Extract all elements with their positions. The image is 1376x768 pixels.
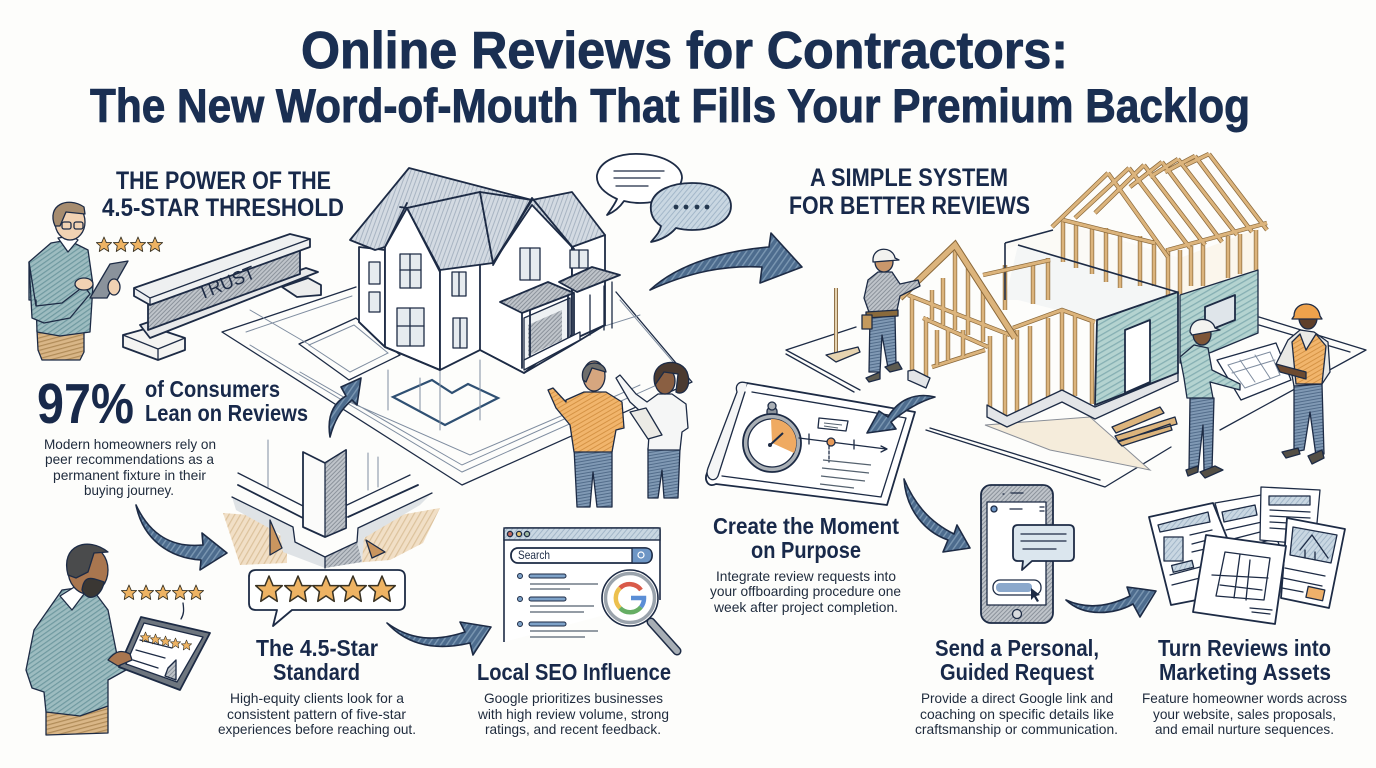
illustration: concrete foundation — [223, 440, 440, 568]
label: trust: TRUST — [195, 263, 259, 305]
text: modern homeowners: peer recommendations as a — [45, 451, 214, 467]
text: create the moment: Create the Moment — [713, 513, 899, 539]
illustration: workers reviewing plans — [1180, 304, 1330, 478]
title — [90, 22, 1250, 132]
illustration: 97 percent heading — [37, 372, 308, 436]
green wall with door — [1095, 292, 1178, 405]
illustration: timber house frame — [900, 154, 1267, 427]
icon: browser search window — [504, 528, 677, 651]
text: modern homeowners: buying journey. — [84, 482, 174, 498]
arrow: up to house — [329, 378, 361, 437]
callout: star rating speech bubble — [249, 570, 405, 626]
text: local seo influence: ratings, and recent feedback. — [485, 721, 661, 737]
text: modern homeowners: permanent fixture in their — [53, 467, 206, 483]
illustration: 97 percent heading: 97% — [37, 372, 134, 436]
heading: the power of the 4.5-star threshold: THE POWER OF THE — [116, 167, 331, 195]
text: the 4.5-star standard: The 4.5-Star — [256, 635, 378, 661]
illustration: stopwatch on blueprint scroll — [706, 382, 915, 505]
arrow: reviews to foundation — [136, 505, 227, 570]
stopwatch — [743, 402, 801, 472]
text: send a personal guided request — [915, 635, 1118, 737]
front wood studs — [908, 248, 1095, 420]
illustration: blueprint ground plan — [222, 287, 692, 485]
icon: phone with message — [981, 485, 1074, 623]
title: The New Word-of-Mouth That Fills Your Premium Backlog — [90, 79, 1250, 132]
text: turn reviews into marketing assets: your website, sales proposals, — [1153, 706, 1336, 722]
illustration: house — [350, 168, 620, 373]
text: local seo influence — [477, 659, 671, 737]
illustration: 97 percent heading: of Consumers — [145, 376, 280, 402]
arrow: house to system — [650, 233, 802, 290]
text: create the moment: your offboarding procedure one — [710, 583, 901, 599]
text: the 4.5-star standard: Standard — [273, 659, 360, 685]
illustration: 97 percent heading: Lean on Reviews — [145, 400, 308, 426]
icon: magnifier with google g — [602, 570, 677, 651]
text: the 4.5-star standard — [218, 635, 416, 737]
heading: the power of the 4.5-star threshold: 4.5-STAR THRESHOLD — [102, 194, 344, 222]
text: send a personal guided request: craftsmanship or communication. — [915, 721, 1118, 737]
text: local seo influence: Google prioritizes businesses — [484, 690, 663, 706]
illustration: trust beam — [123, 234, 321, 360]
text: create the moment: Integrate review requests into — [716, 568, 896, 584]
text: create the moment: on Purpose — [751, 537, 861, 563]
illustration: building frame plan on ground — [786, 317, 1366, 487]
heading: a simple system for better reviews — [789, 164, 1030, 220]
text: turn reviews into marketing assets — [1142, 635, 1347, 737]
arrow: standard to seo — [387, 622, 491, 655]
illustration: bearded man with tablet — [26, 544, 210, 735]
icon: speech bubbles — [597, 154, 731, 242]
text: send a personal guided request: Guided Request — [940, 659, 1094, 685]
text: turn reviews into marketing assets: Turn Reviews into — [1158, 635, 1331, 661]
arrow: stopwatch to phone — [904, 479, 970, 552]
text: create the moment: week after project completion. — [713, 599, 898, 615]
arrow: frame to stopwatch — [867, 396, 935, 433]
text: the 4.5-star standard: experiences before reaching out. — [218, 721, 416, 737]
heading: a simple system for better reviews: A SIMPLE SYSTEM — [810, 164, 1008, 192]
text: modern homeowners — [44, 436, 216, 498]
text: create the moment — [710, 513, 901, 615]
text: turn reviews into marketing assets: Feature homeowner words across — [1142, 690, 1347, 706]
illustration: man with tablet and four stars — [29, 202, 163, 360]
text: send a personal guided request: Provide a direct Google link and — [921, 690, 1113, 706]
illustration: stacked lumber — [1112, 407, 1177, 446]
arrow: phone to documents — [1066, 587, 1156, 617]
icon: marketing documents — [1149, 487, 1345, 624]
title: Online Reviews for Contractors: — [301, 22, 1068, 80]
text: send a personal guided request: coaching on specific details like — [920, 706, 1114, 722]
label: search: Search — [518, 548, 550, 562]
text: turn reviews into marketing assets: and email nurture sequences. — [1155, 721, 1334, 737]
plan sheet — [1217, 343, 1291, 400]
text: modern homeowners: Modern homeowners rely on — [44, 436, 216, 452]
text: the 4.5-star standard: consistent pattern of five-star — [227, 706, 406, 722]
text: local seo influence: Local SEO Influence — [477, 659, 671, 685]
text: the 4.5-star standard: High-equity clients look for a — [230, 690, 404, 706]
rear rooms of frame — [1005, 154, 1267, 405]
text: send a personal guided request: Send a Personal, — [935, 635, 1099, 661]
text: local seo influence: with high review volume, strong — [477, 706, 669, 722]
illustration: worker with tool belt — [826, 249, 920, 382]
heading: the power of the 4.5-star threshold — [102, 167, 344, 222]
illustration: homeowners couple pointing — [548, 361, 689, 507]
heading: a simple system for better reviews: FOR BETTER REVIEWS — [789, 192, 1030, 220]
text: turn reviews into marketing assets: Marketing Assets — [1159, 659, 1331, 685]
